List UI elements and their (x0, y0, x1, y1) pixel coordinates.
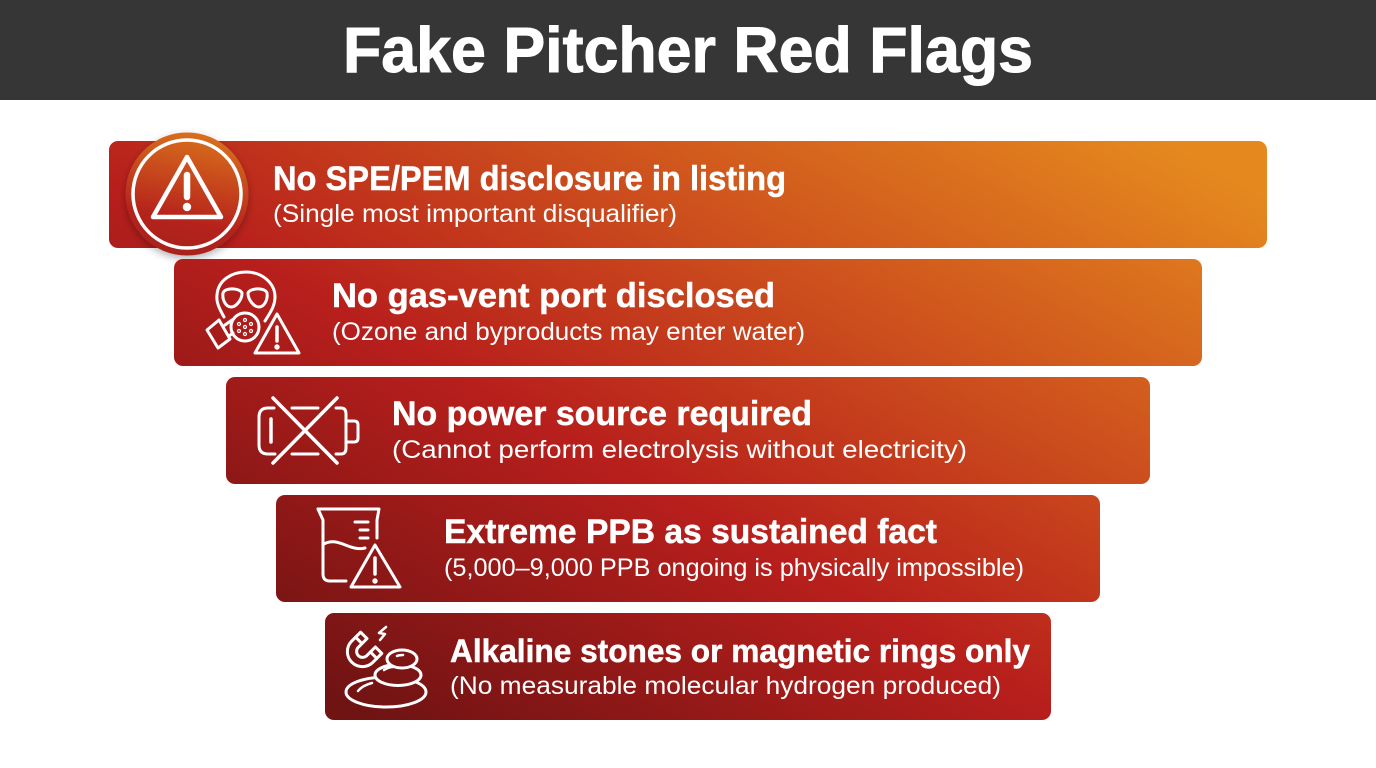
subtext: (Ozone and byproducts may enter water) (332, 318, 805, 346)
subtext: (Cannot perform electrolysis without electricity) (392, 436, 967, 464)
heading: No SPE/PEM disclosure in listing (273, 160, 786, 198)
title banner (0, 0, 1376, 100)
heading: Extreme PPB as sustained fact (444, 513, 937, 551)
title: Fake Pitcher Red Flags (343, 14, 1033, 86)
flag 1: no SPE/PEM disclosure (109, 132, 1267, 256)
heading: Alkaline stones or magnetic rings only (450, 633, 1030, 669)
subtext: (Single most important disqualifier) (273, 200, 677, 228)
flag 5: alkaline stones or magnetic rings (325, 613, 1051, 720)
flag 4: extreme PPB (276, 495, 1100, 602)
subtext: (5,000–9,000 PPB ongoing is physically impossible) (444, 554, 1024, 582)
heading: No gas-vent port disclosed (332, 277, 775, 315)
subtext: (No measurable molecular hydrogen produced) (450, 672, 1001, 700)
icon: magnet and stones (346, 627, 426, 707)
icon: warning badge (126, 132, 248, 256)
icon: crossed-out battery (259, 398, 358, 463)
flag 3: no power source (226, 377, 1150, 484)
icon: beaker with warning (318, 509, 400, 587)
icon: gas mask with warning (207, 272, 299, 353)
flag 2: no gas-vent port (174, 259, 1202, 366)
heading: No power source required (392, 395, 812, 433)
